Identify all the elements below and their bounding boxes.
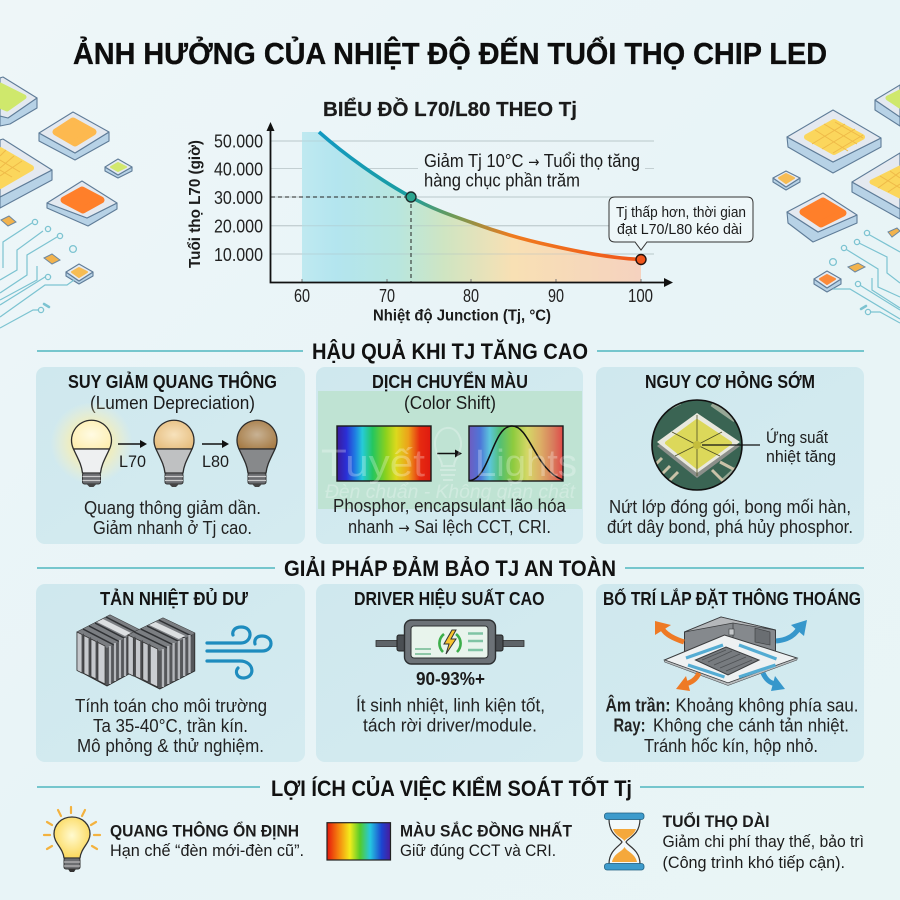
watermark: Lights <box>475 443 577 485</box>
description: Quang thông giảm dần. <box>84 498 261 518</box>
heading: TẢN NHIỆT ĐỦ DƯ <box>100 588 248 609</box>
x axis labels: 60 <box>294 286 310 306</box>
arrow to L80 <box>202 440 229 448</box>
x axis labels <box>294 286 653 306</box>
x axis labels: 80 <box>463 286 479 306</box>
shaded area under curve <box>302 132 641 282</box>
heading: BỐ TRÍ LẮP ĐẶT THÔNG THOÁNG <box>603 588 861 609</box>
arrow: hot air top left <box>655 621 684 642</box>
decoration: LED chips right <box>773 85 900 323</box>
section heading: solutions: GIẢI PHÁP ĐẢM BẢO TJ AN TOÀN <box>284 556 616 581</box>
icon: cassette unit <box>664 617 797 686</box>
watermark: Tuyết <box>321 443 425 485</box>
description <box>84 498 261 538</box>
stress label <box>766 428 836 466</box>
x axis labels: 100 <box>628 286 653 306</box>
icon: wind <box>207 627 271 678</box>
callout: Tj thấp hơn, thời gian <box>616 204 746 221</box>
watermark background <box>318 391 582 509</box>
description <box>606 694 858 756</box>
description: Giảm nhanh ở Tj cao. <box>93 518 252 538</box>
curve <box>319 132 641 260</box>
panel: driver <box>316 584 583 762</box>
benefit text: (Công trình khó tiếp cận). <box>662 853 845 872</box>
description: Không che cánh tản nhiệt. <box>653 716 849 736</box>
description: Tính toán cho môi trường <box>75 696 267 716</box>
benefit text: Giữ đúng CCT và CRI. <box>400 841 556 860</box>
subheading: (Lumen Depreciation) <box>90 393 255 413</box>
description: Ray: <box>614 716 646 736</box>
heading: SUY GIẢM QUANG THÔNG <box>68 371 277 392</box>
description: đứt dây bond, phá hủy phosphor. <box>607 517 853 537</box>
description: Nứt lớp đóng gói, bong mối hàn, <box>609 497 851 517</box>
title: ẢNH HƯỞNG CỦA NHIỆT ĐỘ ĐẾN TUỔI THỌ CHIP LED <box>73 35 827 71</box>
y axis labels: 20.000 <box>214 216 263 236</box>
description: Ta 35-40°C, trần kín. <box>93 716 248 736</box>
description <box>356 696 545 736</box>
annotation <box>424 150 640 190</box>
y axis title: Tuổi thọ L70 (giờ) <box>186 140 204 268</box>
panel: heat sink <box>36 584 305 762</box>
benefit text: TUỔI THỌ DÀI <box>662 812 770 831</box>
stress label: nhiệt tăng <box>766 447 836 466</box>
x axis title: Nhiệt độ Junction (Tj, °C) <box>373 308 551 324</box>
description <box>607 497 853 537</box>
description: Ít sinh nhiệt, linh kiện tốt, <box>356 696 545 716</box>
benefit: uniform colour <box>327 822 573 860</box>
icon: dark bulb <box>237 420 277 487</box>
stress label: Ứng suất <box>766 428 828 447</box>
description: Mô phỏng & thử nghiệm. <box>77 736 264 756</box>
benefit text: Giảm chi phí thay thế, bảo trì <box>662 832 864 851</box>
x axis labels: 90 <box>548 286 564 306</box>
panel: ventilated installation <box>596 584 864 762</box>
chart heading: BIỂU ĐỒ L70/L80 THEO Tj <box>323 97 577 121</box>
benefit text <box>662 812 864 872</box>
description: nhanh → Sai lệch CCT, CRI. <box>348 517 551 537</box>
description: Khoảng không phía sau. <box>676 696 858 716</box>
leader line <box>702 444 760 446</box>
arrow: cool air bottom right <box>763 673 785 691</box>
benefit text: Hạn chế “đèn mới-đèn cũ”. <box>110 841 304 860</box>
arrow <box>437 450 462 458</box>
icon: LED driver <box>376 620 524 664</box>
icon: dimmed bulb <box>154 420 194 487</box>
chart: L70/L80 by Tj <box>186 97 753 324</box>
icon: bright bulb <box>50 402 132 487</box>
arrow to L70 <box>118 440 147 448</box>
benefit: long lifetime <box>604 812 864 872</box>
annotation: Giảm Tj 10°C → Tuổi thọ tăng <box>424 150 640 171</box>
arrow: cool air top right <box>776 620 807 641</box>
y axis labels: 40.000 <box>214 160 263 180</box>
axes <box>270 128 666 282</box>
benefit: stable luminous flux <box>44 807 304 872</box>
description <box>333 496 567 537</box>
icon: heat sinks <box>77 615 195 689</box>
section heading: consequences: HẬU QUẢ KHI TJ TĂNG CAO <box>312 339 588 364</box>
y axis labels: 30.000 <box>214 188 263 208</box>
heading: NGUY CƠ HỎNG SỚM <box>645 371 815 392</box>
benefit text <box>110 822 304 860</box>
description: Âm trần: <box>606 694 670 716</box>
y axis labels <box>214 132 263 265</box>
heading: DRIVER HIỆU SUẤT CAO <box>354 588 544 609</box>
benefit text: QUANG THÔNG ỔN ĐỊNH <box>110 822 299 840</box>
icon: spectrum <box>327 823 390 860</box>
description <box>75 696 267 756</box>
dashed guide lines <box>271 197 411 282</box>
L70 label: L70 <box>119 452 146 471</box>
callout <box>609 197 753 250</box>
marker at 100 degrees <box>636 254 646 264</box>
L80 label: L80 <box>202 452 229 471</box>
y axis labels: 50.000 <box>214 132 263 152</box>
spectrum before <box>337 426 431 481</box>
watermark: Đèn chuẩn - Không gian chất <box>325 482 576 503</box>
section heading: benefits: LỢI ÍCH CỦA VIỆC KIỂM SOÁT TỐT Tj <box>271 775 632 801</box>
description: Phosphor, encapsulant lão hóa <box>333 496 567 516</box>
subheading: (Color Shift) <box>404 393 496 413</box>
y axis labels: 10.000 <box>214 245 263 265</box>
icon: glowing bulb <box>44 807 100 872</box>
annotation: hàng chục phần trăm <box>424 170 580 190</box>
arrow: hot air bottom left <box>676 673 699 691</box>
description: Tránh hốc kín, hộp nhỏ. <box>644 736 818 756</box>
icon: cracked chip macro <box>652 400 742 490</box>
heading: DỊCH CHUYỂN MÀU <box>372 371 528 392</box>
description: tách rời driver/module. <box>363 716 537 736</box>
icon: hourglass <box>604 813 644 870</box>
decoration: LED chips left <box>0 77 132 328</box>
benefit text: MÀU SẮC ĐỒNG NHẤT <box>400 822 573 840</box>
panel: lumen depreciation <box>36 367 305 544</box>
benefit text <box>400 822 573 860</box>
panel: early failure <box>596 367 864 544</box>
spectrum after with curve <box>469 426 563 481</box>
efficiency value: 90-93%+ <box>416 669 485 689</box>
watermark <box>321 428 577 503</box>
panel: color shift <box>316 367 583 544</box>
x axis labels: 70 <box>379 286 395 306</box>
marker at 73 degrees <box>406 192 416 202</box>
callout: đạt L70/L80 kéo dài <box>617 221 742 238</box>
